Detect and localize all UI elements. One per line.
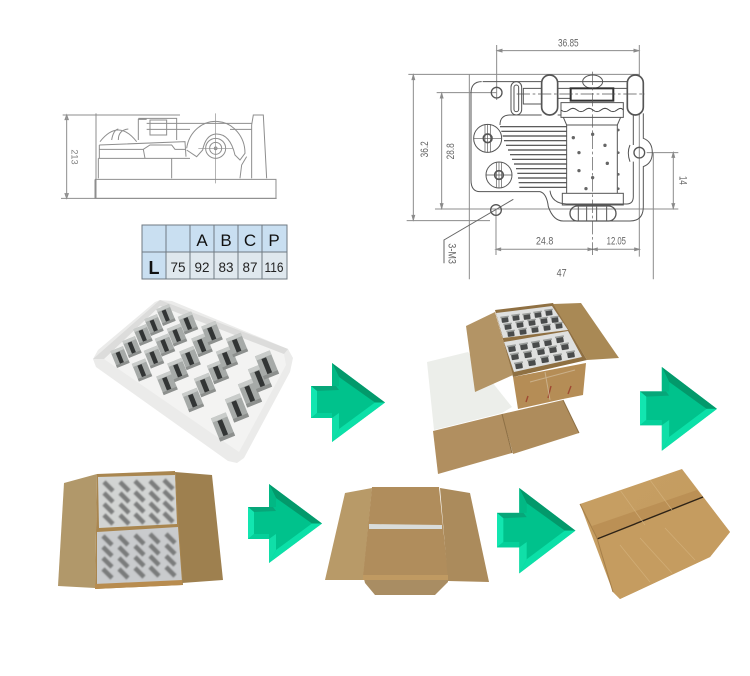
table headers: A <box>196 231 208 250</box>
carton interior and rim <box>495 303 587 377</box>
photo: carton with trays covered <box>58 471 223 589</box>
seam <box>597 497 703 539</box>
photo: open carton with trays <box>427 303 619 474</box>
table values: 116 <box>264 259 284 275</box>
carton bottom <box>363 575 448 595</box>
side-view technical drawing <box>61 113 277 198</box>
lower tray <box>504 331 582 372</box>
upper tray <box>496 306 568 338</box>
photo: carton flaps folded <box>325 487 489 595</box>
bottom flaps <box>433 414 512 474</box>
tray modules <box>110 304 279 442</box>
dimension lines and labels: 36.2 <box>419 141 431 157</box>
photo: foam tray with movements <box>93 300 293 463</box>
dimension lines and labels: 14 <box>676 176 688 185</box>
right flap <box>175 472 223 583</box>
table headers: C <box>244 231 256 250</box>
bottom strip <box>95 580 182 589</box>
dimension table <box>142 225 287 279</box>
dimension lines and labels: 24.8 <box>536 236 553 248</box>
photo: sealed carton <box>580 469 730 599</box>
movement plate outline <box>471 75 652 221</box>
tape strip <box>369 524 442 529</box>
cylinder drum <box>517 72 645 255</box>
dimension lines and labels: 47 <box>557 268 567 280</box>
carton front <box>513 363 586 409</box>
right flap <box>553 303 619 360</box>
lower tray in bag <box>97 527 182 584</box>
left flap <box>325 488 372 580</box>
dimension: 213 <box>61 113 277 198</box>
dimension lines and labels: 36.85 <box>558 37 579 49</box>
dimension: 213: 213 <box>69 149 79 165</box>
arrow 4 <box>497 488 575 573</box>
top-view technical drawing <box>407 37 688 280</box>
comb teeth <box>500 127 567 187</box>
arrow 1 <box>311 363 385 442</box>
dimension lines and labels <box>407 37 688 280</box>
table values <box>170 259 284 275</box>
dimension lines and labels: 12.05 <box>607 236 626 248</box>
left flap <box>466 312 513 392</box>
protective sheet <box>427 352 512 430</box>
dimension lines and labels: 28.8 <box>445 143 457 159</box>
table headers <box>148 231 280 278</box>
table values: 75 <box>170 259 186 275</box>
table headers: B <box>220 231 232 250</box>
table values: 87 <box>242 259 258 275</box>
table headers: P <box>268 231 280 250</box>
side-view movement outline <box>95 113 276 198</box>
arrow 3 <box>248 484 322 563</box>
upper tray in bag <box>98 475 177 528</box>
carton center <box>95 471 183 589</box>
tray contents <box>500 309 576 369</box>
right flap <box>440 488 489 582</box>
table values: 83 <box>218 259 234 275</box>
tape band <box>592 490 703 538</box>
center panel <box>363 487 448 577</box>
arrow 2 <box>640 367 717 451</box>
table headers: L <box>148 258 160 278</box>
left flap <box>58 474 97 588</box>
bagged tray pattern <box>103 480 175 578</box>
dimension lines and labels: 3-M3 <box>446 243 458 264</box>
table values: 92 <box>194 259 210 275</box>
